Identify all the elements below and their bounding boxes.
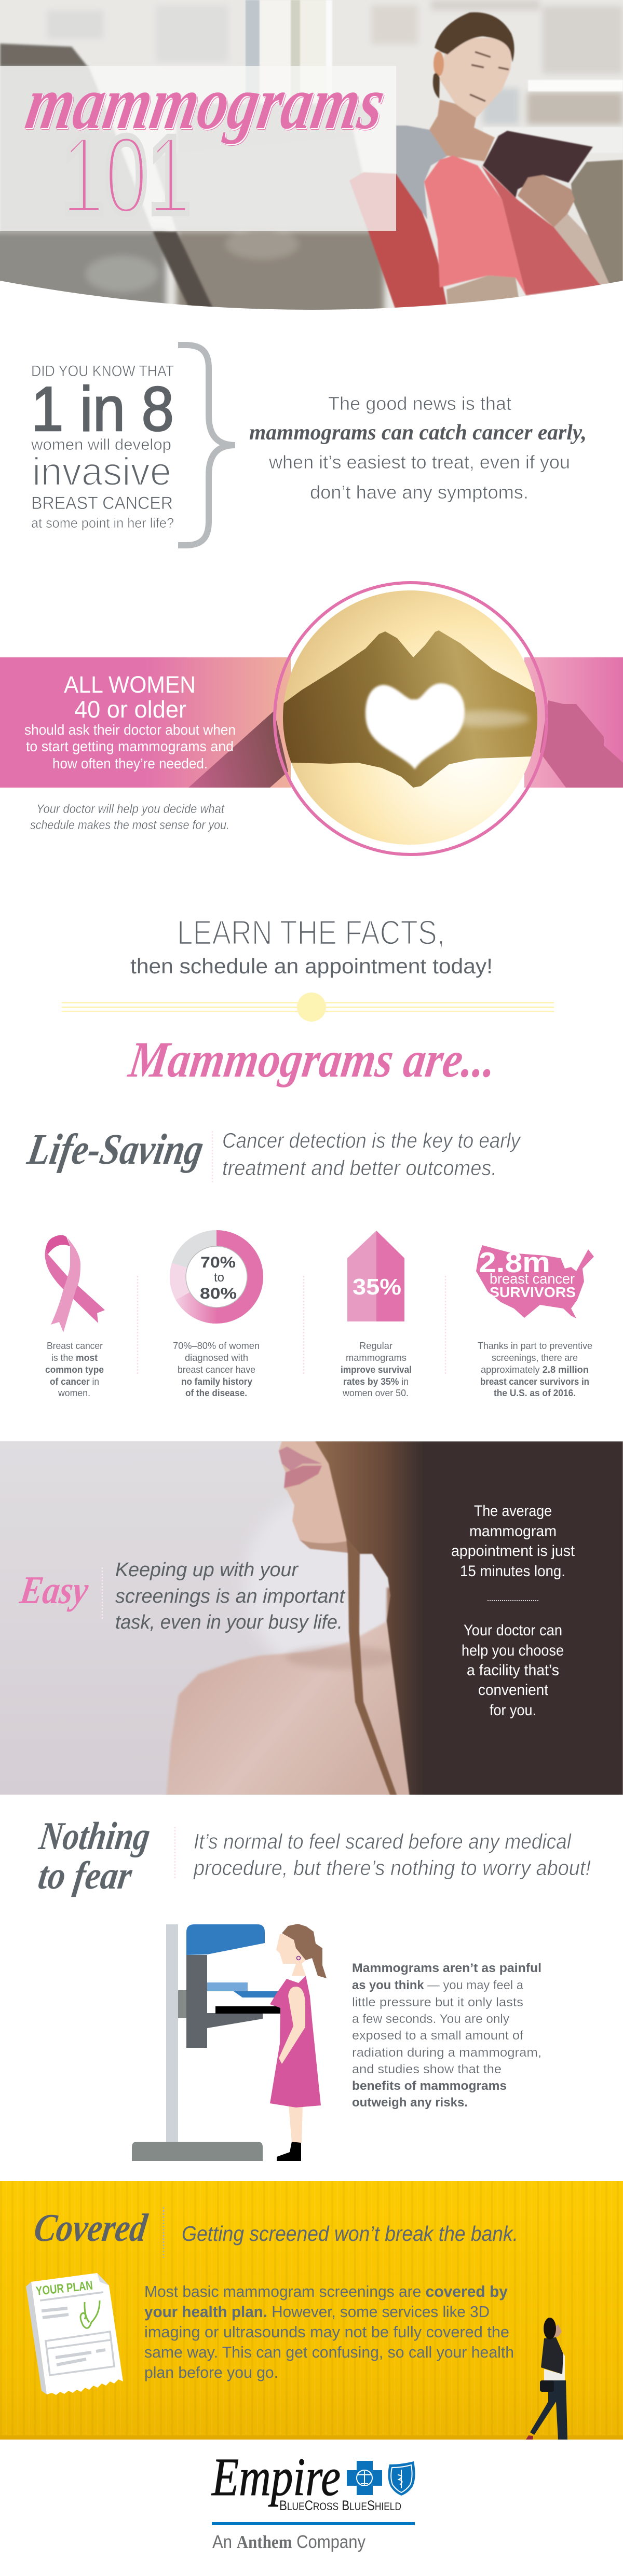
explanation text: outweigh any risks. [352,2096,468,2110]
pink band left [0,657,291,788]
panel: hero header [0,0,623,322]
coverage text: your health plan. However, some services like 3D [144,2303,490,2321]
icon: US map survivors: SURVIVORS [490,1284,576,1300]
chart: donut 70 to 80 percent [170,1230,263,1324]
appointment note: help you choose [462,1642,564,1659]
section intro: treatment and better outcomes. [222,1156,497,1180]
caption: most common cancer [45,1341,104,1398]
explanation text: benefits of mammograms [352,2079,507,2093]
explanation text: Mammograms aren’t as painful [352,1961,541,1975]
caption: most common cancer: of cancer in [50,1376,99,1387]
icon: US map survivors [476,1245,594,1318]
hand [518,175,575,227]
appointment note: The average [474,1503,552,1520]
icon: up arrow 35 percent: 35% [353,1274,401,1300]
caption: no family history: diagnosed with [185,1353,248,1363]
section intro [115,1559,345,1633]
upper lip [279,1447,322,1471]
curly brace [178,345,235,545]
caption: survivors: Thanks in part to preventive [478,1341,592,1351]
icon: US map survivors: breast cancer [490,1271,575,1287]
appointment note: Your doctor can [464,1622,562,1639]
all women text: to start getting mammograms and [26,738,234,754]
right sofa [571,160,623,291]
section title [36,1814,153,1897]
icon: heart shaped hands [280,630,540,788]
explanation text: exposed to a small amount of [352,2029,523,2043]
appointment note [451,1503,575,1719]
all women text: should ask their doctor about when [24,722,236,738]
sofa left [0,44,400,231]
heading: learn the facts: LEARN THE FACTS, [177,913,445,952]
caption: no family history: of the disease. [185,1388,247,1398]
good news message: when it’s easiest to treat, even if you [268,451,570,473]
appointment note: mammogram [469,1523,557,1540]
all women text: how often they’re needed. [52,755,208,772]
statistic text block: at some point in her life? [31,515,174,531]
forearm [554,214,609,285]
statistic text block: invasive [32,450,171,494]
photo: walking woman [526,2318,567,2440]
coverage text: same way. This can get confusing, so call your health [144,2343,514,2361]
caption: improve survival: mammograms [346,1353,407,1363]
title: 101: 101 [61,113,191,237]
panel: all women 40 or older [0,583,623,855]
sunlit circle [283,590,537,845]
coverage text: plan before you go. [144,2363,278,2381]
caption: most common cancer: women. [58,1388,90,1398]
lower lip [284,1466,322,1488]
statistic text block [31,363,174,531]
main leg lit part [424,156,526,295]
section intro: Keeping up with your [115,1559,299,1581]
caption: improve survival: Regular [359,1341,392,1351]
ear [434,51,444,76]
explanation text: little pressure but it only lasts [352,1995,523,2009]
icon: pink ribbon [45,1235,105,1332]
coverage text: Most basic mammogram screenings are covered by [144,2282,508,2301]
caption: survivors: screenings, there are [492,1353,578,1363]
window frame [245,0,623,132]
skin behind hair [387,1588,423,1795]
caption: improve survival [341,1341,412,1398]
heading: learn the facts: then schedule an appointment today! [130,954,493,978]
translucent title panel [0,66,396,231]
statistic text block: BREAST CANCER [31,493,173,513]
illustration: mammogram machine [132,1924,280,2161]
doctor note: Your doctor will help you decide what [36,802,225,816]
good news message: The good news is that [328,393,511,414]
appointment note: appointment is just [451,1542,575,1560]
icon: stethoscope [80,2301,100,2328]
donut values: 70% [200,1254,236,1271]
statistic text block: DID YOU KNOW THAT [31,363,174,380]
icon: up arrow 35 percent [347,1231,404,1321]
caption: survivors [478,1341,592,1398]
hair [315,1441,623,1800]
section intro: procedure, but there’s nothing to worry about! [193,1856,591,1880]
caption: survivors: approximately 2.8 million [481,1365,589,1375]
pink band right [524,657,623,788]
statistic text block: women will develop [31,435,171,453]
left leg [349,172,448,311]
coverage text [144,2282,514,2381]
section intro: Getting screened won’t break the bank. [182,2222,518,2246]
caption: improve survival: rates by 35% in [343,1376,409,1387]
title: mammograms: mammograms [20,61,391,145]
statistic text block: 1 in 8 [31,374,174,444]
main leg shaded part [481,166,601,295]
section title: Nothing [36,1814,153,1858]
panel: easy [0,1441,623,1800]
section intro: It’s normal to feel scared before any medical [194,1829,572,1853]
good news message: mammograms can catch cancer early, [249,421,587,445]
neck [429,100,495,161]
heading: learn the facts [130,913,493,978]
explanation text: and studies show that the [352,2062,502,2076]
heart opening [365,683,465,769]
logo: Empire BlueCross BlueShield: Empire [211,2447,341,2507]
caption: survivors: the U.S. as of 2016. [494,1388,576,1398]
yellow divider [62,993,554,1022]
all women text: ALL WOMEN [64,671,196,698]
coverage text: imaging or ultrasounds may not be fully covered the [144,2323,509,2341]
doctor note [30,802,229,832]
explanation text: radiation during a mammogram, [352,2046,541,2060]
icon: your plan document [26,2273,123,2395]
illustration: woman in pink dress [270,1924,327,2161]
arm silhouettes on band [188,700,623,788]
photo: woman profile with long hair [0,1441,623,1800]
caption: no family history: 70%–80% of women [173,1341,260,1351]
appointment note: convenient [478,1682,549,1699]
shirt [396,126,448,219]
all women text: 40 or older [74,696,186,723]
donut values [200,1254,237,1302]
appointment note: 15 minutes long. [460,1563,565,1580]
caption: improve survival: women over 50. [342,1388,409,1398]
good news message: don’t have any symptoms. [310,481,529,503]
section title: to fear [36,1853,136,1897]
section title: Easy [17,1568,91,1612]
section intro: screenings is an important [115,1586,345,1607]
section intro [193,1829,591,1880]
icon: US map survivors: 2.8m [479,1246,550,1278]
appointment note: for you. [490,1702,536,1719]
face and chin [279,1441,363,1553]
caption: most common cancer: is the most [51,1353,98,1363]
panel: nothing to fear [36,1814,591,2161]
panel: 1 in 8 statistic [31,345,587,545]
shoulder [166,1621,410,1800]
face [440,38,512,118]
tagline: An Anthem Company [212,2532,365,2552]
section intro: task, even in your busy life. [115,1611,343,1633]
icon: blue cross [347,2461,382,2495]
calf [445,275,519,304]
hero photo: woman reading tablet on sofa [0,0,623,322]
icon: blue shield [388,2461,415,2496]
section intro [222,1128,521,1180]
appointment note: a facility that’s [467,1662,559,1679]
explanation text: a few seconds. You are only [352,2012,509,2026]
tablet [483,131,593,198]
facial features [470,52,509,101]
light glare [446,710,530,727]
panel: life-saving [24,1126,594,1398]
pink ring [275,583,547,855]
caption: survivors: breast cancer survivors in [480,1376,589,1387]
caption: no family history: no family history [181,1376,252,1387]
yellow corrugated wall [0,2181,623,2440]
caption: no family history [173,1341,260,1398]
explanation text: as you think — you may feel a [352,1978,524,1992]
donut values: to [214,1271,224,1285]
caption: no family history: breast cancer have [178,1365,255,1375]
logo rule [212,2522,415,2525]
explanation text [352,1961,541,2110]
section title: Life-Saving [24,1126,207,1174]
hair [435,12,514,62]
section intro: Cancer detection is the key to early [222,1128,521,1152]
logo: Empire BlueCross BlueShield [211,2447,415,2552]
heading: mammograms are: Mammograms are... [125,1031,499,1088]
shadow under chin [300,1540,353,1553]
donut values: 80% [200,1285,237,1302]
section title: Covered [32,2206,151,2250]
caption: most common cancer: Breast cancer [47,1341,103,1351]
caption: improve survival: improve survival [341,1365,412,1375]
doctor note: schedule makes the most sense for you. [30,818,229,832]
good news message [249,393,587,503]
logo: Empire BlueCross BlueShield: BLUECROSS BLUESHIELD [279,2498,401,2513]
panel: covered [0,2181,623,2440]
caption: most common cancer: common type [45,1365,104,1375]
all women text [24,671,236,772]
icon: your plan document: YOUR PLAN [35,2279,93,2298]
